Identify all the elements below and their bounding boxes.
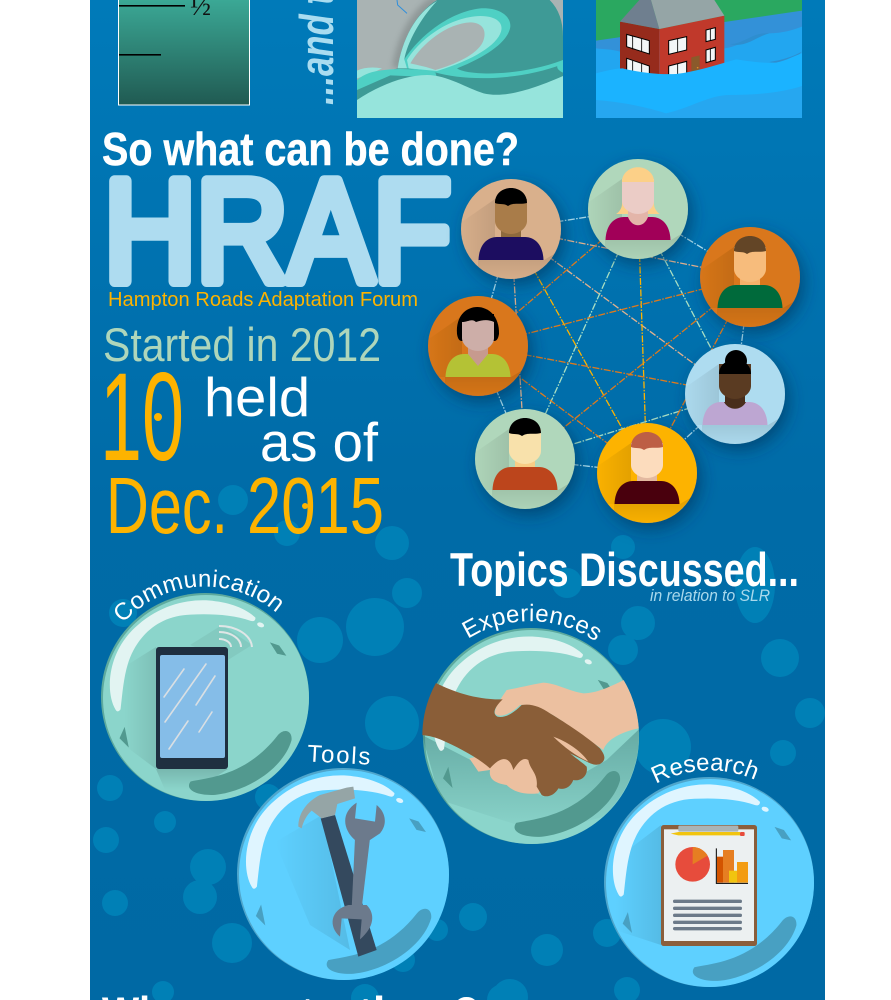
bubble: Tools	[237, 740, 449, 980]
stat: 10 held as of Dec. 2015	[100, 348, 384, 550]
stat: 10 held as of Dec. 2015: 10	[100, 348, 184, 487]
icon: hammer and wrench	[298, 787, 385, 957]
subtitle: Hampton Roads Adaptation Forum: Hampton Roads Adaptation Forum	[108, 289, 418, 311]
icon: clipboard with charts	[661, 825, 757, 946]
person: green circle, red shirt	[470, 409, 580, 514]
bubble: Experiences	[422, 604, 639, 844]
icon: smartphone	[156, 647, 228, 769]
heading: Topics Discussed...: Topics Discussed...	[450, 543, 799, 596]
bubble: Experiences: Experiences	[462, 604, 600, 640]
bubble: Research	[604, 758, 814, 987]
icon: wifi signal	[219, 626, 252, 647]
stat: 10 held as of Dec. 2015: Dec.	[106, 461, 228, 550]
network connecting lines	[478, 209, 750, 473]
bubble: Research: Research	[650, 758, 758, 783]
subheading: in relation to SLR: in relation to SLR	[650, 586, 770, 605]
stat: 10 held as of Dec. 2015: held	[204, 366, 310, 428]
label: Tools: Tools	[307, 740, 371, 771]
label: Experiences	[468, 621, 604, 648]
title: HRAF: HRAF	[104, 150, 451, 312]
heading: So what can be done?: So what can be done?	[102, 123, 519, 175]
label: Research	[656, 770, 765, 785]
background bubbles pattern	[93, 485, 825, 1000]
ruler gauge graphic	[118, 0, 250, 105]
person: green circle, blonde hair	[583, 159, 693, 264]
person: light blue circle, hair bun	[680, 344, 790, 449]
illustration: storm wave	[357, 0, 563, 118]
person: yellow circle, maroon shirt	[592, 423, 702, 528]
illustration: flooded house	[596, 0, 802, 118]
icon: handshake	[417, 680, 643, 796]
person: orange circle, bob haircut	[423, 296, 533, 401]
person: orange circle, green shirt	[695, 227, 805, 332]
label: Communication	[123, 587, 286, 623]
stat: 10 held as of Dec. 2015: as of	[260, 411, 379, 473]
network of people	[423, 159, 805, 528]
stat: 10 held as of Dec. 2015: 2015	[247, 461, 384, 550]
text: Started in 2012: Started in 2012	[103, 318, 381, 371]
person: tan circle, navy shirt	[456, 179, 566, 284]
bubble: Communication	[101, 570, 309, 801]
bubble: Communication: Communication	[115, 570, 282, 620]
